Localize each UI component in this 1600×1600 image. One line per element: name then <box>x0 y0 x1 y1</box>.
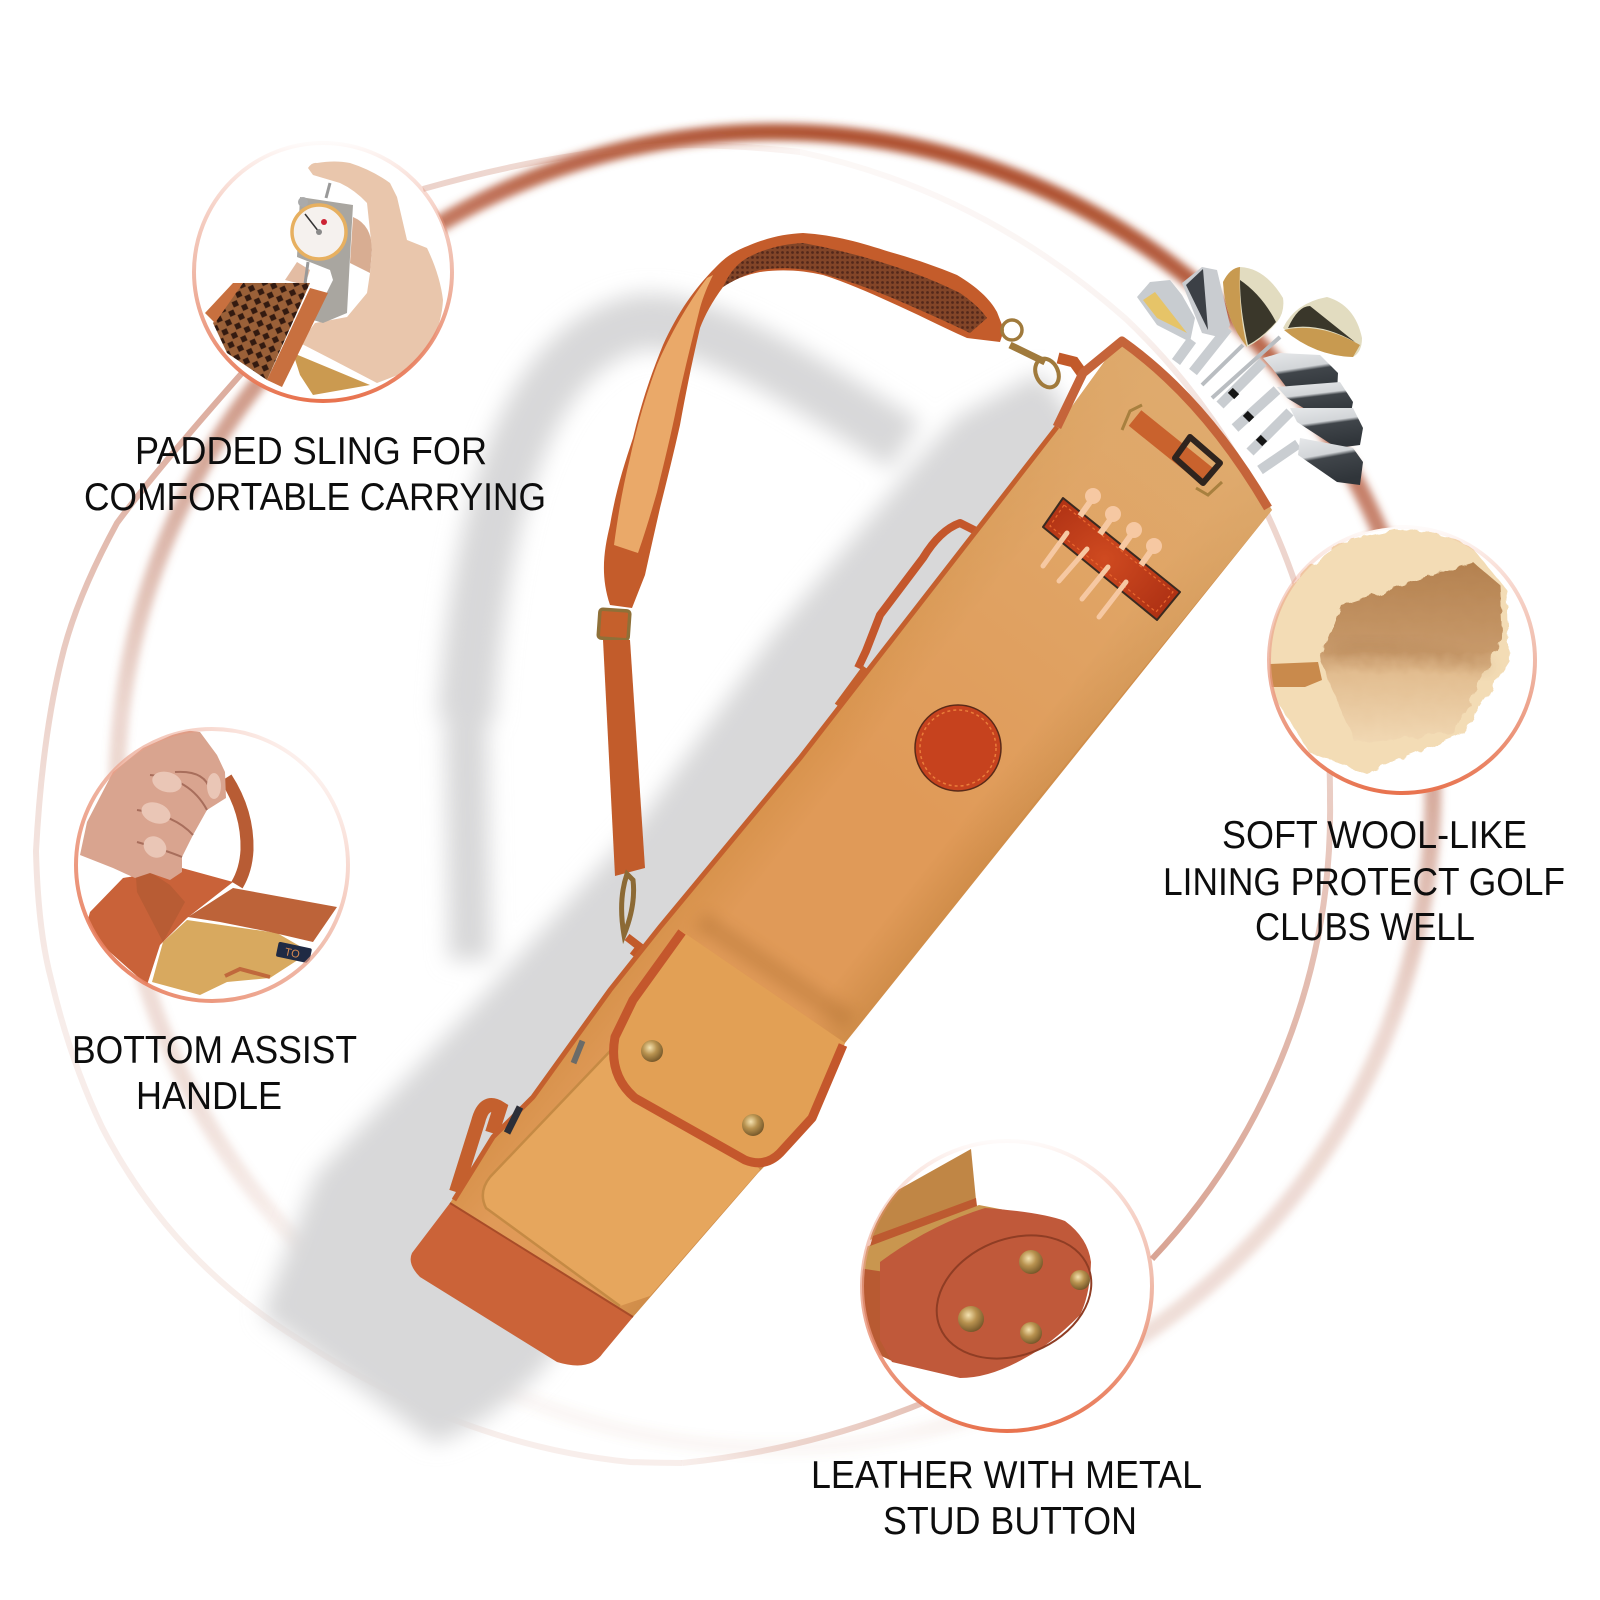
bottom assist handle on bag <box>456 1105 500 1192</box>
caption: wool lining <box>1163 814 1565 949</box>
stud 3 <box>958 1306 984 1332</box>
wedge four <box>1298 438 1363 485</box>
stud 1 <box>1019 1250 1043 1274</box>
leather base <box>411 1203 633 1365</box>
caption: padded sling <box>84 430 546 519</box>
tee holder strip <box>1043 488 1180 620</box>
tan lining <box>860 1205 1005 1285</box>
side tab <box>838 668 866 706</box>
flap top shadow <box>700 920 850 1022</box>
stitched seam <box>936 1234 1092 1360</box>
fairway wood one <box>1223 267 1283 347</box>
canvas wedge <box>870 1149 976 1240</box>
thumb tip <box>285 262 310 285</box>
fingernails <box>142 772 221 858</box>
top lightening <box>800 340 1272 870</box>
wedge three <box>1290 408 1363 448</box>
adjuster buckle <box>598 609 630 640</box>
flap stud left <box>641 1040 663 1062</box>
bag body <box>411 340 1272 1365</box>
interior fold shadow <box>1448 660 1491 674</box>
side edge piping <box>454 427 1057 1200</box>
caption: wool lining: LINING PROTECT GOLF <box>1163 861 1565 904</box>
mesh strap <box>213 283 310 380</box>
lower pocket panel <box>483 1020 760 1306</box>
iron with gold back <box>1137 280 1195 342</box>
canvas stitch strip <box>225 969 270 977</box>
bag drop shadow <box>262 322 1075 1443</box>
iron black back <box>1182 267 1230 338</box>
club shafts <box>1176 328 1298 470</box>
webbing <box>862 1268 892 1361</box>
orange band <box>870 1198 977 1246</box>
round leather patch <box>915 705 1001 791</box>
fleece outer <box>1268 529 1509 773</box>
webbing tab <box>627 937 640 956</box>
fairway wood two <box>1283 297 1362 357</box>
canvas panel <box>152 920 310 995</box>
side carry handle <box>858 523 978 668</box>
canvas body <box>450 340 1272 1317</box>
webbing <box>603 640 645 876</box>
inset: leather base with metal studs <box>858 1141 1152 1431</box>
wedge one <box>1263 353 1338 398</box>
padded shoulder section <box>604 233 1004 608</box>
tan pad <box>614 275 713 553</box>
fleece interior <box>1320 562 1503 743</box>
bag canvas underneath <box>293 353 370 395</box>
caption: padded sling: COMFORTABLE CARRYING <box>84 476 546 519</box>
adjuster strap and buckle <box>1122 405 1222 495</box>
golf clubs <box>1137 267 1363 485</box>
leather trim <box>85 868 233 985</box>
zip pull <box>571 1040 585 1064</box>
caption: bottom assist handle: BOTTOM ASSIST <box>72 1029 357 1072</box>
woven tab <box>1270 662 1322 687</box>
flap stud right <box>742 1114 764 1136</box>
caption: wool lining: CLUBS WELL <box>1255 906 1475 949</box>
hand <box>80 730 226 880</box>
woven band <box>188 888 337 942</box>
caption: leather base: LEATHER WITH METAL <box>811 1454 1202 1497</box>
stud 4 <box>1020 1322 1042 1344</box>
decorative thin ring <box>36 145 1330 1463</box>
caption: bottom assist handle <box>72 1029 357 1118</box>
upper snap hook <box>1002 320 1063 391</box>
top rim <box>1057 341 1268 508</box>
lower snap hook <box>622 874 634 935</box>
inset: padded sling <box>194 143 452 401</box>
label tag <box>276 942 312 963</box>
stud 2 <box>1070 1270 1090 1290</box>
strap binding right <box>267 288 328 387</box>
hand <box>300 162 443 383</box>
caption: padded sling: PADDED SLING FOR <box>135 430 487 473</box>
handle tag <box>507 1107 520 1133</box>
decorative thick blurred ring <box>117 132 1433 1448</box>
caption: wool lining: SOFT WOOL-LIKE <box>1222 814 1527 857</box>
leather body <box>880 1208 1091 1378</box>
caption: bottom assist handle: HANDLE <box>136 1075 282 1118</box>
index finger behind <box>350 217 372 273</box>
caption: leather base <box>811 1454 1202 1543</box>
caption: leather base: STUD BUTTON <box>883 1500 1137 1543</box>
strap binding left <box>205 283 243 323</box>
leather seam <box>450 1203 633 1317</box>
loop webbing <box>226 778 247 885</box>
shoulder strap <box>598 233 1084 956</box>
top tab <box>1058 358 1084 376</box>
flap trim <box>614 932 843 1163</box>
wedge two <box>1277 382 1353 418</box>
upper tee heads <box>1080 488 1162 565</box>
label tag: TO <box>284 946 301 961</box>
mesh underside <box>723 243 987 333</box>
lower tee points <box>1043 533 1126 617</box>
thickness gauge <box>292 183 353 323</box>
inset: wool lining <box>1268 527 1535 793</box>
woven handle strap <box>136 873 185 942</box>
inset: bottom assist handle <box>76 729 348 1001</box>
finger creases <box>137 772 210 857</box>
front flap pocket <box>613 930 845 1166</box>
